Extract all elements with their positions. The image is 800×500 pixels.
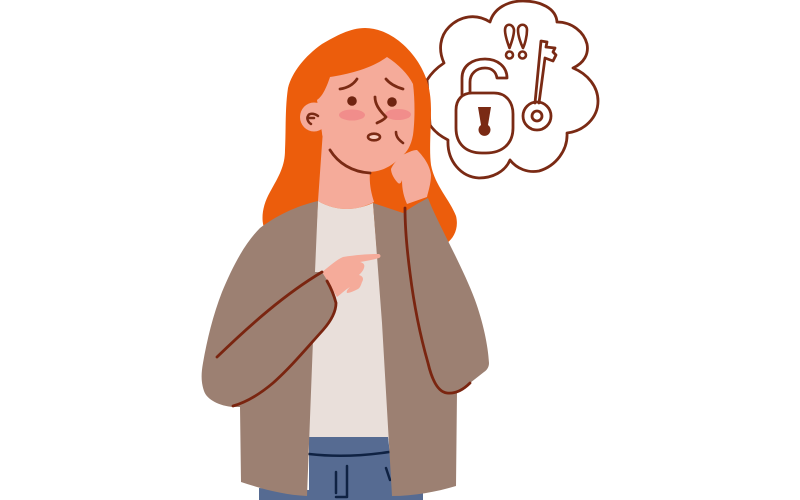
key bow [523,102,551,130]
icon: open padlock [456,59,513,153]
jeans [259,437,423,500]
icon: key [523,41,556,130]
jacket right panel [373,198,489,496]
ear [300,102,328,132]
jaw line [330,150,370,173]
face [317,57,414,172]
t-shirt [305,201,392,440]
right sleeve seam [405,208,470,393]
thought bubble [427,1,598,178]
key shaft and teeth [535,41,556,103]
key hole [532,111,542,121]
eyebrows [340,79,403,89]
eyes [347,96,397,107]
hand on chin [391,150,431,204]
hair [263,28,457,260]
left sleeve cuff [233,281,336,406]
cloud outline [427,1,598,178]
jacket left panel and sleeve [202,201,336,496]
left exclamation mark [505,25,514,48]
padlock shackle [462,59,507,97]
pocket lines [336,466,390,497]
pointing hand [322,254,380,297]
mouth [368,134,380,140]
right exclamation mark [518,25,527,48]
left sleeve seam [217,272,322,357]
waistband line [309,452,389,456]
cheek dimple [396,132,403,143]
neck [318,130,400,209]
padlock body [456,93,513,153]
woman figure [202,28,489,500]
icon: exclamation marks [505,25,527,58]
cheeks [339,109,411,120]
padlock keyhole [478,107,491,136]
nose [375,97,386,123]
